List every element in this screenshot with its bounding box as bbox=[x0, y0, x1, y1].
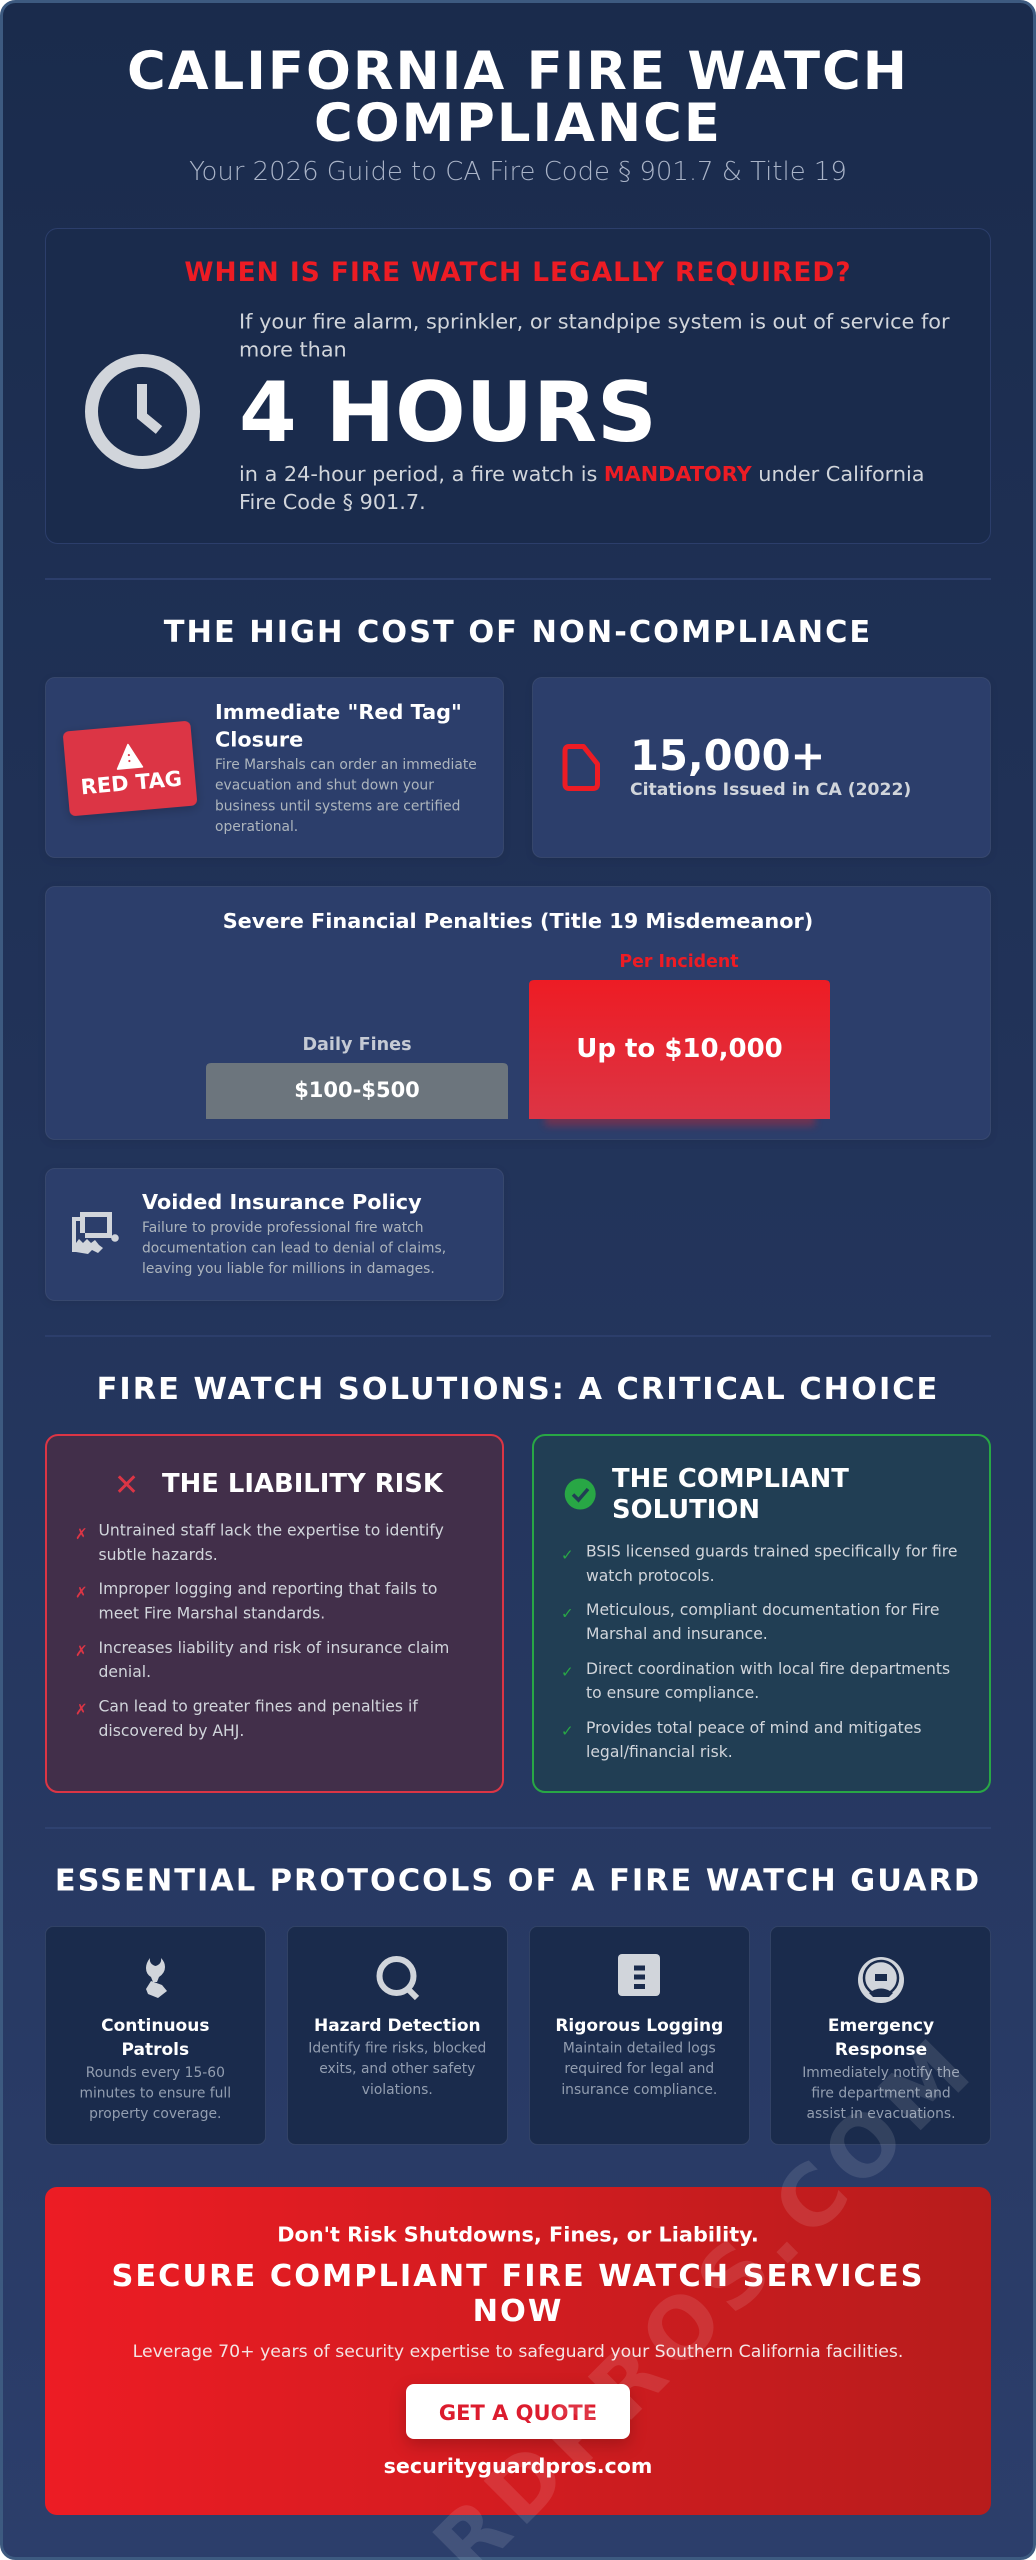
text: continuous patrols: property coverage. bbox=[89, 2106, 221, 2122]
list: risks bbox=[75, 1522, 449, 1740]
text: emergency response: Immediately notify the bbox=[802, 2065, 960, 2081]
panel: the compliant solution bbox=[533, 1435, 990, 1792]
text: red tag closure bbox=[215, 700, 477, 835]
subtitle: Your 2026 Guide to CA Fire Code § 901.7 & Title 19 bbox=[189, 157, 847, 187]
heading: penalties: Severe Financial Penalties (Title 19 Misdemeanor) bbox=[223, 909, 813, 933]
list: risks: Untrained staff lack the expertise to identify bbox=[98, 1522, 444, 1540]
text: voided insurance: Failure to provide professional fire watch bbox=[142, 1220, 424, 1236]
icon: log document bbox=[618, 1954, 660, 1996]
bar: daily fines: $100-$500 bbox=[294, 1078, 420, 1102]
text: rigorous logging: required for legal and bbox=[564, 2061, 714, 2077]
text: out of service: more than bbox=[239, 338, 347, 362]
list: solutions: legal/financial risk. bbox=[586, 1743, 733, 1761]
text: voided insurance: leaving you liable for millions in damages. bbox=[142, 1261, 435, 1277]
text: hazard detection: violations. bbox=[362, 2082, 433, 2098]
text: don't risk: Don't Risk Shutdowns, Fines, or Liability. bbox=[277, 2223, 759, 2247]
text: out of service bbox=[239, 310, 950, 362]
icon: document bbox=[565, 746, 598, 788]
list: solutions: ✓ bbox=[561, 1663, 574, 1681]
icon: red x: ✕ bbox=[114, 1468, 139, 1503]
button: get a quote: GET A QUOTE bbox=[439, 2401, 597, 2425]
list: risks: ✗ bbox=[75, 1525, 88, 1543]
heading: legal requirement: WHEN IS FIRE WATCH LEGALLY REQUIRED? bbox=[184, 257, 852, 288]
text: red tag closure: Immediate "Red Tag" bbox=[215, 700, 462, 724]
panel: citations bbox=[532, 678, 990, 858]
list: solutions: Marshal and insurance. bbox=[586, 1625, 768, 1643]
heading: compliant solution: THE COMPLIANT bbox=[612, 1464, 849, 1494]
label: citations: Citations Issued in CA (2022) bbox=[630, 780, 911, 800]
list: risks: discovered by AHJ. bbox=[98, 1722, 244, 1740]
text: hazard detection: Identify fire risks, blocked bbox=[308, 2041, 486, 2057]
text: leverage: Leverage 70+ years of security expertise to safeguard your Southern California facilities. bbox=[133, 2342, 903, 2362]
heading: secure services: NOW bbox=[473, 2294, 563, 2329]
heading: secure services: SECURE COMPLIANT FIRE WATCH SERVICES bbox=[112, 2259, 924, 2294]
text: rigorous logging bbox=[555, 2016, 723, 2098]
heading: high cost: THE HIGH COST OF NON-COMPLIANCE bbox=[164, 615, 872, 650]
list: solutions: BSIS licensed guards trained specifically for fire bbox=[586, 1543, 957, 1561]
bar: daily fines: Daily Fines bbox=[302, 1035, 412, 1055]
icon: red tag bbox=[63, 721, 198, 816]
text: mandatory: in a 24-hour period, a fire watch is MANDATORY under California bbox=[239, 462, 925, 486]
panel: when is fire watch required bbox=[46, 228, 990, 544]
text: hazard detection: Hazard Detection bbox=[314, 2016, 481, 2036]
text: red tag closure: evacuation and shut down your bbox=[215, 778, 434, 794]
list: risks: denial. bbox=[98, 1663, 151, 1681]
text: red tag closure: Fire Marshals can order an immediate bbox=[215, 757, 477, 773]
list: solutions: ✓ bbox=[561, 1546, 574, 1564]
text: rigorous logging: insurance compliance. bbox=[561, 2082, 717, 2098]
list: risks: ✗ bbox=[75, 1700, 88, 1718]
list: solutions: to ensure compliance. bbox=[586, 1684, 759, 1702]
panel: hazard detection bbox=[288, 1926, 508, 2144]
heading: solutions: FIRE WATCH SOLUTIONS: A CRITICAL CHOICE bbox=[97, 1372, 939, 1407]
text: continuous patrols: Continuous bbox=[101, 2016, 209, 2036]
heading: liability risk: THE LIABILITY RISK bbox=[162, 1469, 444, 1499]
text: continuous patrols: Patrols bbox=[121, 2040, 189, 2060]
text: voided insurance: documentation can lead to denial of claims, bbox=[142, 1240, 446, 1256]
list: risks: meet Fire Marshal standards. bbox=[98, 1604, 325, 1622]
panel: rigorous logging bbox=[530, 1926, 750, 2144]
icon: clock bbox=[92, 360, 194, 462]
text: red tag closure: operational. bbox=[215, 819, 298, 835]
heading: secure services bbox=[112, 2259, 924, 2329]
bar: per incident bbox=[529, 952, 830, 1126]
bar: daily fines bbox=[206, 1035, 508, 1119]
icon: patrol bbox=[146, 1958, 167, 1998]
list: solutions: ✓ bbox=[561, 1604, 574, 1622]
text: mandatory bbox=[239, 462, 925, 514]
text: emergency response: Response bbox=[835, 2040, 927, 2060]
stat: 15,000+: 15,000+ bbox=[630, 731, 825, 780]
text: emergency response bbox=[802, 2016, 960, 2122]
text: emergency response: fire department and bbox=[811, 2086, 951, 2102]
icon: emergency operator bbox=[858, 1957, 904, 2003]
stat: 4 hours: 4 HOURS bbox=[239, 364, 657, 461]
button: get a quote bbox=[406, 2384, 630, 2439]
list: solutions: Meticulous, compliant documentation for Fire bbox=[586, 1601, 939, 1619]
text: hazard detection bbox=[308, 2016, 486, 2098]
text: out of service: If your fire alarm, sprinkler, or standpipe system is out of service for bbox=[239, 310, 950, 334]
text: mandatory: Fire Code § 901.7. bbox=[239, 490, 426, 514]
list: risks: subtle hazards. bbox=[98, 1546, 218, 1564]
icon: torn documents bbox=[72, 1212, 119, 1254]
text: continuous patrols: minutes to ensure full bbox=[79, 2086, 231, 2102]
panel: financial penalties bbox=[46, 886, 990, 1140]
list: risks: ✗ bbox=[75, 1584, 88, 1602]
list: risks: Improper logging and reporting that fails to bbox=[98, 1580, 437, 1598]
icon: magnifier bbox=[380, 1959, 417, 1998]
title: CALIFORNIA FIRE WATCH bbox=[127, 41, 909, 102]
panel: voided insurance bbox=[46, 1168, 504, 1300]
text: rigorous logging: Maintain detailed logs bbox=[563, 2041, 716, 2057]
icon: check circle bbox=[565, 1478, 596, 1510]
text: website: securityguardpros.com bbox=[384, 2454, 652, 2478]
text: red tag closure: Closure bbox=[215, 728, 303, 752]
heading: compliant solution: SOLUTION bbox=[612, 1495, 760, 1525]
text: hazard detection: exits, and other safety bbox=[319, 2061, 475, 2077]
list: solutions: ✓ bbox=[561, 1722, 574, 1740]
list: risks: ✗ bbox=[75, 1642, 88, 1660]
heading: compliant solution bbox=[612, 1464, 849, 1525]
text: red tag closure: business until systems are certified bbox=[215, 798, 460, 814]
list: solutions: Provides total peace of mind and mitigates bbox=[586, 1719, 921, 1737]
text: voided insurance: Voided Insurance Policy bbox=[142, 1190, 422, 1214]
text: emergency response: Emergency bbox=[828, 2016, 934, 2036]
text: continuous patrols bbox=[79, 2016, 231, 2122]
list: solutions bbox=[561, 1543, 957, 1761]
panel: continuous patrols bbox=[46, 1926, 266, 2144]
panel: red tag closure bbox=[46, 678, 504, 858]
panel: emergency response bbox=[770, 1926, 990, 2144]
list: solutions: Direct coordination with local fire departments bbox=[586, 1660, 950, 1678]
title: COMPLIANCE bbox=[314, 93, 722, 154]
panel: call to action bbox=[45, 2187, 991, 2515]
text: continuous patrols: Rounds every 15-60 bbox=[86, 2065, 225, 2081]
bar: per incident: Up to $10,000 bbox=[576, 1034, 783, 1064]
panel: the liability risk bbox=[46, 1435, 503, 1792]
icon: red tag: RED TAG bbox=[80, 767, 183, 799]
list: solutions: watch protocols. bbox=[586, 1567, 715, 1585]
text: voided insurance bbox=[142, 1190, 446, 1277]
list: risks: Increases liability and risk of insurance claim bbox=[98, 1639, 449, 1657]
text: emergency response: assist in evacuations. bbox=[806, 2106, 956, 2122]
heading: essential protocols: ESSENTIAL PROTOCOLS OF A FIRE WATCH GUARD bbox=[55, 1864, 981, 1899]
text: rigorous logging: Rigorous Logging bbox=[555, 2016, 723, 2036]
bar chart: fines bbox=[206, 952, 830, 1126]
list: risks: Can lead to greater fines and penalties if bbox=[98, 1698, 418, 1716]
bar: per incident: Per Incident bbox=[619, 952, 739, 972]
title bbox=[127, 41, 909, 154]
